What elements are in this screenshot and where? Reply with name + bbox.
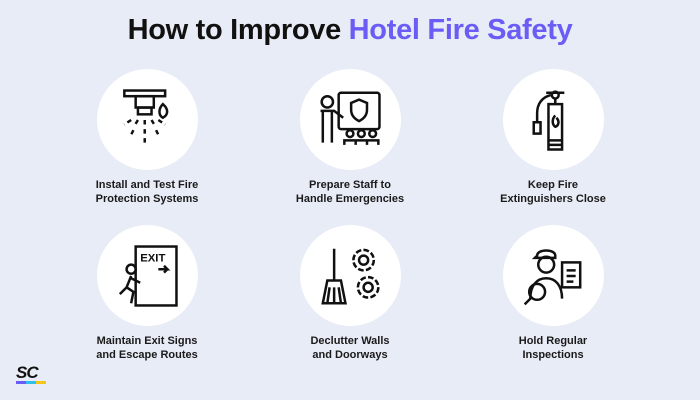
label [296, 179, 404, 205]
icon: sprinkler [96, 69, 198, 170]
logo: SC [16, 363, 38, 382]
item: fire protection systems [96, 69, 198, 205]
item: extinguishers [500, 69, 606, 205]
item: declutter [300, 225, 401, 361]
icon: extinguisher [502, 69, 604, 170]
label: Declutter Walls [310, 335, 390, 347]
icon: broom and flowers [300, 225, 400, 326]
label: and Escape Routes [96, 349, 198, 361]
label: Install and Test Fire [96, 179, 198, 191]
label: Prepare Staff to [309, 179, 391, 191]
icon: exit: EXIT [140, 252, 165, 264]
logo [16, 363, 46, 384]
label: and Doorways [312, 349, 388, 361]
icon: inspector [502, 225, 604, 326]
item: staff [296, 69, 404, 205]
item: inspections [503, 225, 604, 361]
label: Maintain Exit Signs [97, 335, 197, 347]
label: Protection Systems [96, 193, 198, 205]
label: Extinguishers Close [500, 193, 606, 205]
label [310, 335, 390, 361]
icon: exit [96, 225, 198, 326]
label: Hold Regular [519, 335, 587, 347]
label: Handle Emergencies [296, 193, 404, 205]
label [519, 335, 587, 361]
item: exit signs [96, 225, 198, 361]
label: Inspections [522, 349, 584, 361]
label [96, 179, 198, 205]
icon: trainer [300, 69, 400, 170]
title: How to Improve Hotel Fire Safety [128, 14, 572, 46]
label: Keep Fire [528, 179, 578, 191]
label [500, 179, 606, 205]
label [96, 335, 198, 361]
